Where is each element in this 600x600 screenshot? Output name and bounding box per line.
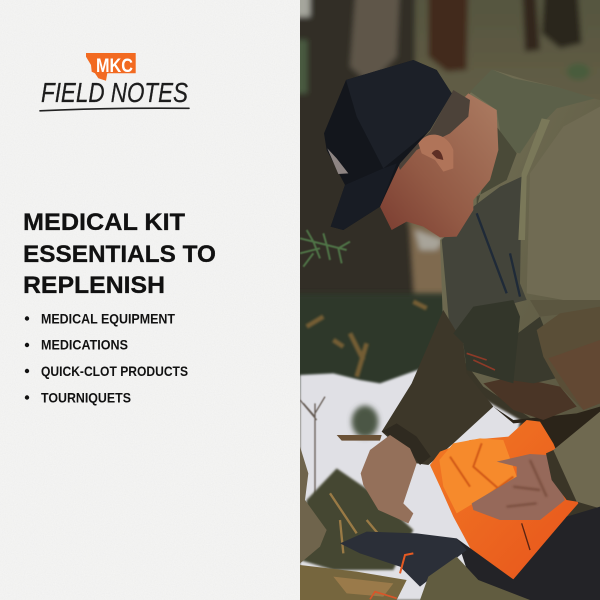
heading: ESSENTIALS TO xyxy=(23,241,216,268)
pine branch xyxy=(300,230,350,267)
heading xyxy=(23,209,216,299)
orange bag xyxy=(430,420,578,579)
hands xyxy=(361,435,565,523)
jacket body xyxy=(440,69,600,420)
dark gap under pouches xyxy=(493,407,600,477)
head xyxy=(380,90,498,237)
bullet list: MEDICATIONS xyxy=(41,336,128,352)
brush xyxy=(300,468,413,570)
bullet list: QUICK-CLOT PRODUCTS xyxy=(41,363,188,379)
logo underline xyxy=(40,108,189,111)
bullet list: MEDICAL EQUIPMENT xyxy=(41,310,175,326)
panel: left text panel xyxy=(0,0,300,600)
logo: MKC Field Notes xyxy=(40,53,189,111)
foliage xyxy=(280,293,453,393)
pouches xyxy=(453,300,600,420)
left sleeve xyxy=(382,310,493,465)
bottom gear xyxy=(300,447,600,600)
heading: MEDICAL KIT xyxy=(23,209,185,236)
jacket sleeve xyxy=(546,412,600,508)
forest background xyxy=(280,0,600,307)
heading: REPLENISH xyxy=(23,272,165,299)
logo wordmark: FIELD NOTES xyxy=(41,77,188,108)
bullet list xyxy=(25,310,188,406)
icon: orange Montana badge: MKC xyxy=(96,56,133,77)
snow xyxy=(300,367,520,600)
black cap xyxy=(324,60,452,230)
icon: orange Montana badge xyxy=(86,53,136,81)
photo: man packing orange bag in snowy forest xyxy=(300,0,600,600)
bullet list: TOURNIQUETS xyxy=(41,390,131,406)
